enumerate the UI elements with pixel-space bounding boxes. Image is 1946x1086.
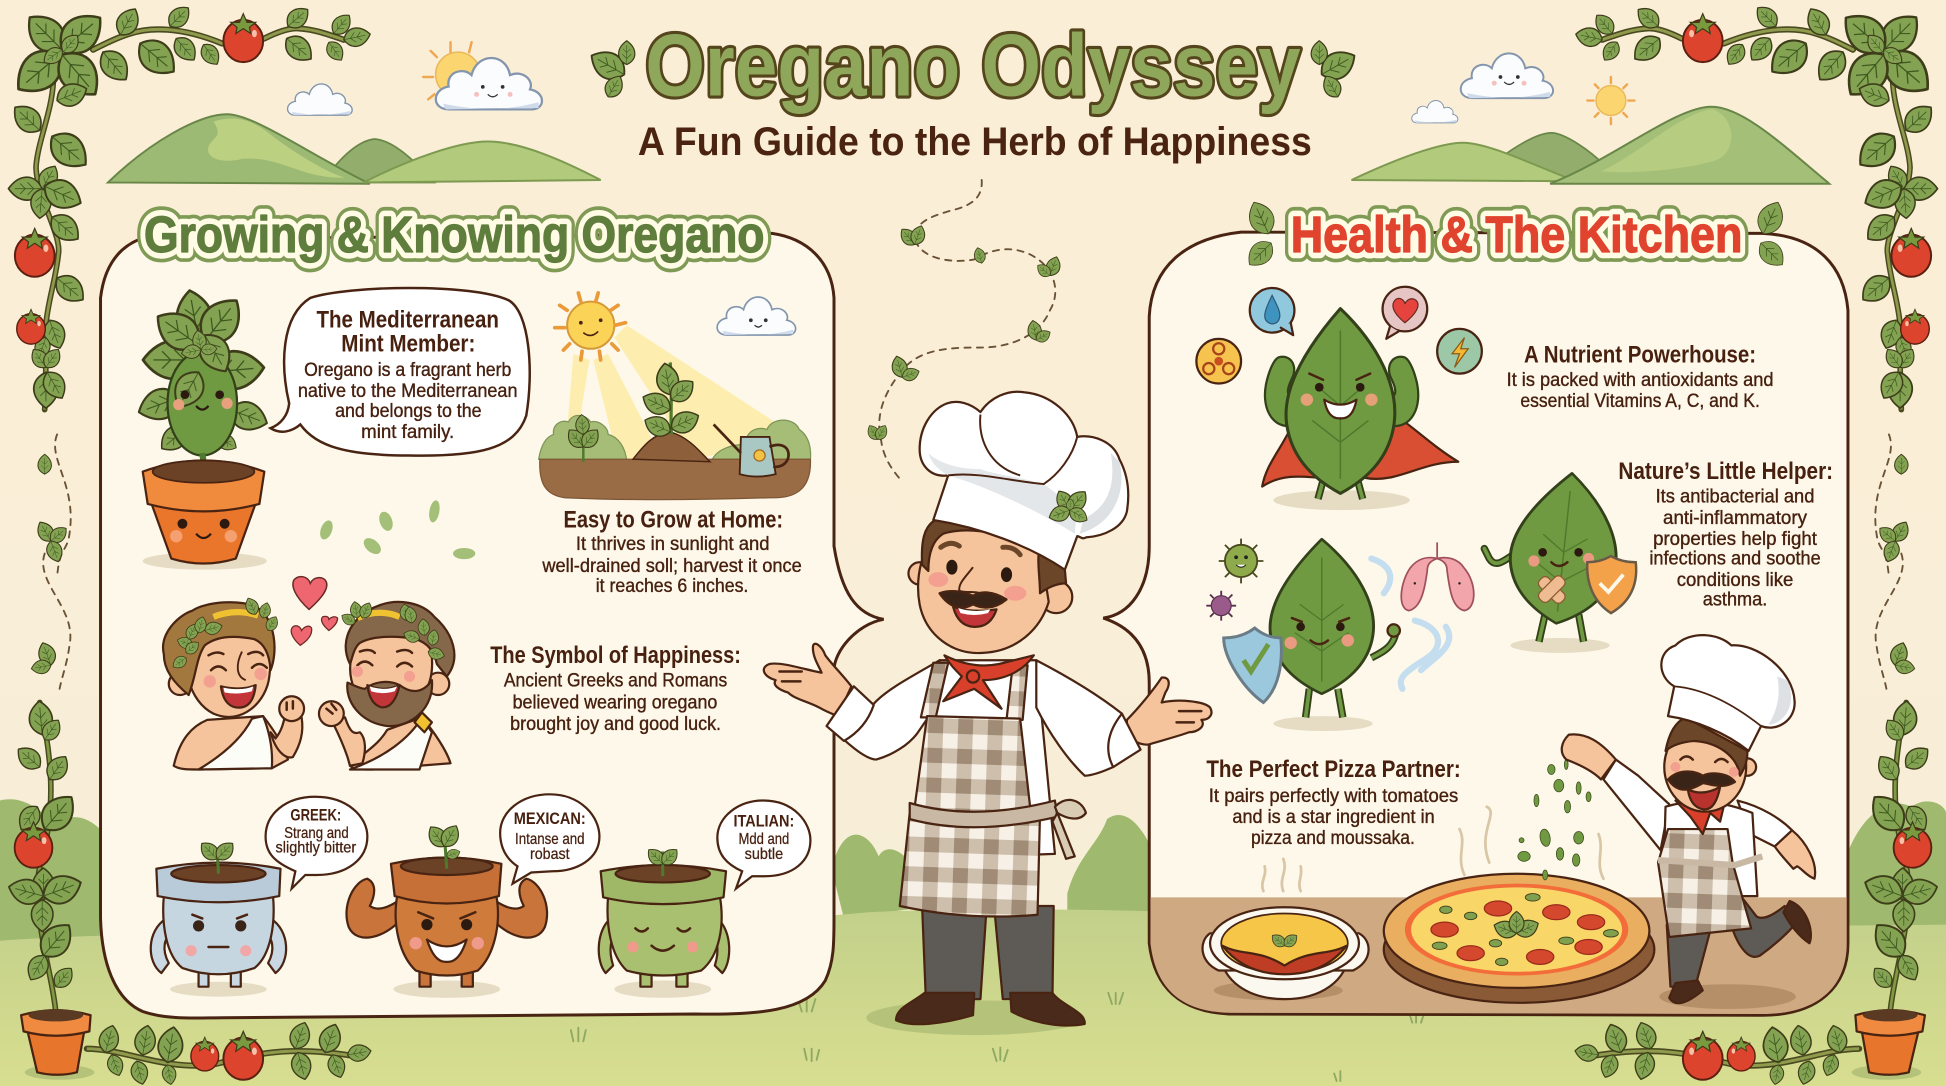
speech bubble: mediterranean mint member: and belongs to the [335,401,482,422]
character: greek oregano pot [151,838,286,997]
heading: health and the kitchen: Health & The Kitchen [1291,206,1742,263]
speech bubble: italian: ITALIAN: [733,812,794,831]
text block: perfect pizza partner: It pairs perfectly with tomatoes [1209,786,1458,807]
text block: nutrient powerhouse: It is packed with antioxidants and [1507,370,1773,391]
character: shield leaf with germs and lungs [1206,539,1474,731]
speech bubble: greek: slightly bitter [276,840,356,857]
text block: nutrient powerhouse: A Nutrient Powerhouse: [1524,341,1756,368]
subtitle: A Fun Guide to the Herb of Happiness [638,120,1312,164]
heading: health and the kitchen: Health & The Kitchen [1291,206,1742,263]
moussaka dish [1203,907,1369,1000]
speech bubble: italian [717,801,810,889]
text block: nature's little helper [1618,458,1833,611]
speech bubble: mexican: MEXICAN: [514,809,586,828]
character: bandaged leaf with orange shield [1484,468,1636,653]
character: main chef gesturing with both arms [764,392,1211,1035]
character: italian oregano pot [599,845,729,998]
speech bubble: mexican [500,794,599,884]
speech bubble: mediterranean mint member: The Mediterranean [316,307,499,334]
speech bubble: mexican: Intanse and [515,831,585,848]
illustration: happy ancient greek and roman [163,577,454,769]
title: Oregano Odyssey [645,16,1301,115]
vines: left corners [6,2,372,1086]
text block: easy to grow at home: Easy to Grow at Home: [563,506,783,533]
text block: nutrient powerhouse [1507,341,1773,412]
heading: health and the kitchen [1243,198,1789,272]
dashed flight path with leaves [865,180,1063,482]
illustration: smiling oregano plant in orange pot [134,287,272,570]
text block: easy to grow at home: it reaches 6 inches. [596,576,748,597]
speech bubble: greek: Strang and [284,825,349,842]
title leaves right [1311,41,1361,101]
heading: health and the kitchen: Health & The Kitchen [1291,206,1742,263]
hills right [1352,107,1829,184]
text block: symbol of happiness: The Symbol of Happiness: [490,642,741,669]
heading: growing and knowing oregano: Growing & Knowing Oregano [144,206,764,263]
text block: nature's little helper: asthma. [1703,590,1767,611]
text block: nature's little helper: Its antibacterial and [1656,487,1814,508]
text block: perfect pizza partner: and is a star ingredient in [1232,807,1435,828]
character: superhero leaf with nutrient icons [1196,287,1482,510]
text block: nutrient powerhouse: essential Vitamins A, C, and K. [1520,391,1760,412]
speech bubble: greek [266,797,367,889]
title leaves left [585,41,635,101]
panel: health and kitchen [1103,232,1848,1015]
text block: perfect pizza partner [1206,756,1461,849]
hills left [108,114,601,184]
text block: perfect pizza partner: The Perfect Pizza Partner: [1206,756,1461,783]
text block: easy to grow at home [541,506,802,597]
character: mexican oregano pot [347,822,547,998]
speech bubble: italian: Mdd and [738,831,789,848]
bushes and ground [0,799,1946,1086]
speech bubble: mediterranean mint member [271,288,530,456]
speech bubble: mediterranean mint member: Oregano is a fragrant herb [304,360,511,381]
speech bubble: mediterranean mint member: native to the Mediterranean [298,381,518,402]
text block: easy to grow at home: It thrives in sunlight and [576,534,769,555]
character: small chef sprinkling oregano [1562,635,1815,1009]
speech bubble: greek: GREEK: [290,805,341,824]
text block: nature's little helper: properties help fight [1653,529,1818,550]
text block: perfect pizza partner: pizza and moussaka. [1251,828,1415,849]
text block: symbol of happiness [490,642,741,735]
speech bubble: mediterranean mint member: Mint Member: [341,330,475,357]
heading: growing and knowing oregano: Growing & Knowing Oregano [144,206,764,263]
steam [1262,807,1603,891]
text block: easy to grow at home: well-drained soll; harvest it once [541,556,802,577]
speech bubble: mediterranean mint member: mint family. [361,422,454,443]
vines: right corners [1574,2,1940,1086]
pizza on wooden board [1384,874,1654,1003]
text block: symbol of happiness: brought joy and good luck. [510,714,721,735]
sun and clouds right [1412,53,1634,124]
speech bubble: italian: subtle [745,846,783,863]
text block: symbol of happiness: Ancient Greeks and Romans [504,670,727,691]
illustration: sun, seedling, watering can [539,293,811,500]
text block: nature's little helper: Nature’s Little Helper: [1618,458,1833,485]
text block: symbol of happiness: believed wearing oregano [513,693,717,714]
sun and clouds left [288,42,542,115]
text block: nature's little helper: infections and soothe [1649,549,1821,570]
text block: nature's little helper: anti-inflammatory [1663,508,1807,529]
floating leaves [318,499,475,559]
text block: nature's little helper: conditions like [1677,570,1793,591]
panel: growing and knowing [101,233,884,1018]
falling oregano flakes [1518,760,1591,880]
speech bubble: mexican: robast [530,846,570,863]
heading: growing and knowing oregano: Growing & Knowing Oregano [144,206,764,263]
